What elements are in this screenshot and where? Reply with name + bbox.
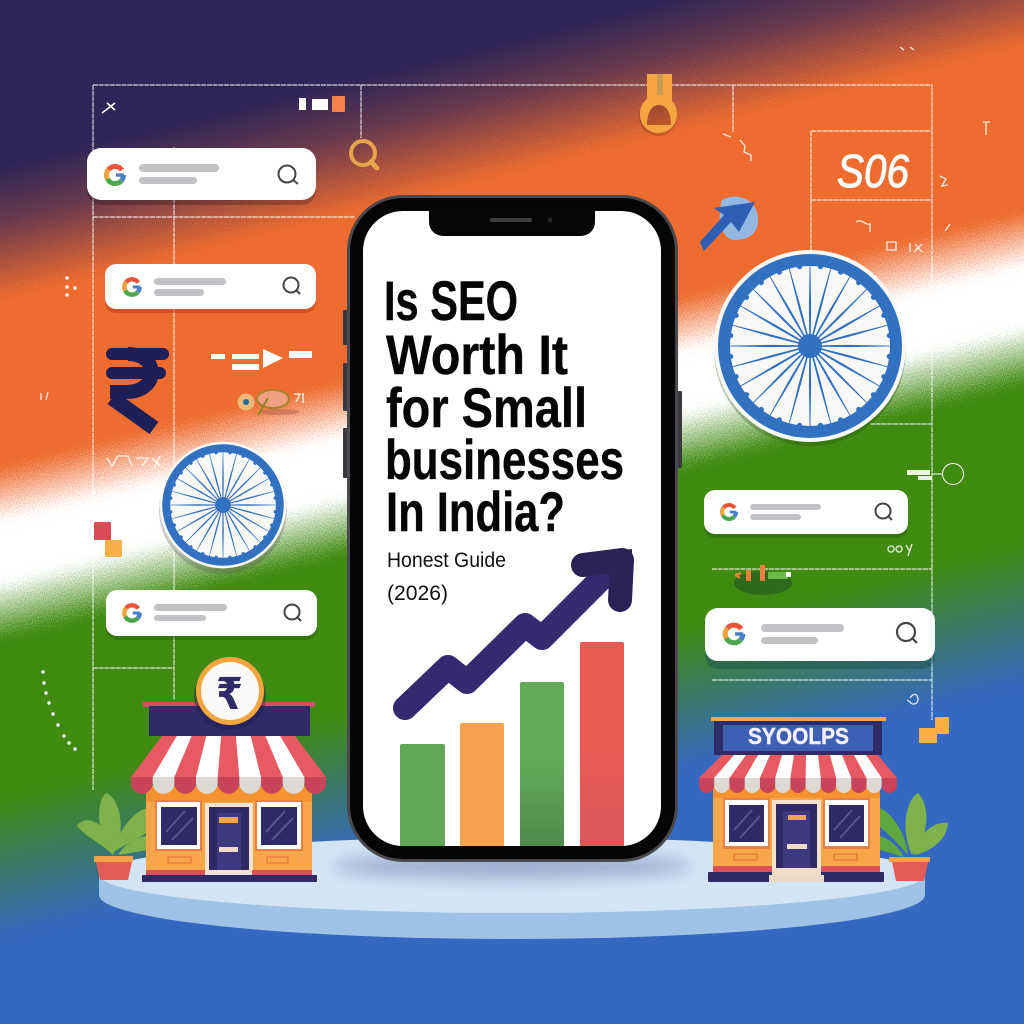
base left xyxy=(146,870,205,875)
bar chart xyxy=(400,642,624,846)
shop body left xyxy=(146,786,312,874)
plant left xyxy=(77,793,148,855)
storefront left xyxy=(77,657,326,882)
platform xyxy=(99,837,925,939)
icon: dots cluster xyxy=(65,276,77,297)
icon: red and yellow squares xyxy=(94,522,122,557)
icon: orange magnifier xyxy=(351,141,377,168)
headline: In India? xyxy=(386,480,565,543)
pot left xyxy=(96,862,132,880)
icon: small bars on green blob xyxy=(734,565,792,595)
search bar 4 xyxy=(704,490,908,538)
wall plaques left xyxy=(168,857,288,863)
headline: Is SEO xyxy=(384,269,518,332)
phone shadow on platform xyxy=(332,853,692,879)
headline: Worth It xyxy=(386,323,568,386)
storefront right xyxy=(699,717,948,882)
shop body right xyxy=(713,785,880,872)
icon: dashes and arrowhead xyxy=(211,349,312,370)
door left xyxy=(205,803,253,874)
search bar 5 xyxy=(705,608,935,669)
icon: blue pointer arrow xyxy=(700,197,758,251)
awning left xyxy=(131,736,326,794)
phone body xyxy=(347,195,678,862)
awning right xyxy=(699,755,897,793)
phone side buttons xyxy=(343,310,682,478)
steps xyxy=(772,868,821,875)
search bar 1 xyxy=(87,148,316,205)
icon: pin marker xyxy=(102,103,115,113)
plant right xyxy=(880,793,948,857)
rupee badge xyxy=(194,657,266,730)
headline xyxy=(384,269,624,543)
stat label: S06: S06 xyxy=(837,145,909,197)
search bar 2 xyxy=(105,264,316,313)
phone xyxy=(343,195,682,862)
squiggle marks xyxy=(41,47,990,704)
subtitle xyxy=(387,549,506,605)
sign board right xyxy=(711,717,886,721)
icon: yellow squares xyxy=(919,717,949,743)
pot right xyxy=(892,862,928,881)
icon: large Ashoka wheel xyxy=(714,250,906,446)
icon: small Ashoka wheel xyxy=(159,442,287,574)
icon: rupee symbol xyxy=(110,354,163,428)
wireframe grid lines xyxy=(93,85,932,790)
search bar 3 xyxy=(106,590,317,640)
rupee badge: ₹ xyxy=(216,669,243,720)
sign board left xyxy=(143,702,315,707)
icon: dotted arc xyxy=(41,670,77,751)
phone screen xyxy=(363,211,661,846)
base right xyxy=(713,866,772,872)
wall plaques right xyxy=(734,854,857,860)
icon: small squares top xyxy=(299,96,345,112)
notch xyxy=(429,210,595,236)
subtitle: Honest Guide xyxy=(387,549,506,572)
windows left xyxy=(155,800,303,851)
icon: small emblem xyxy=(238,390,303,415)
icon: dashes and circle right xyxy=(907,464,964,484)
door right xyxy=(772,800,821,868)
headline: for Small xyxy=(386,376,587,439)
icon: orange lock ring xyxy=(639,74,677,136)
shop name: SYOOLPS xyxy=(748,723,849,749)
growth arrow xyxy=(405,549,632,708)
headline: businesses xyxy=(385,428,624,491)
windows right xyxy=(723,798,870,849)
subtitle: (2026) xyxy=(387,582,448,605)
